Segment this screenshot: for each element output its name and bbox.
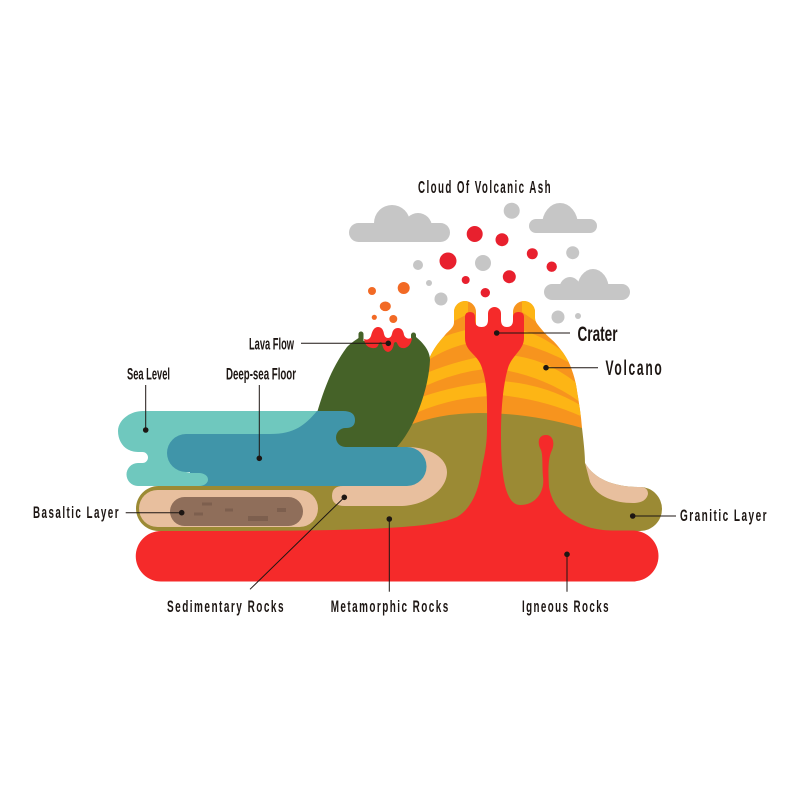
label: Lava Flow: Lava Flow [249,334,294,354]
label: Sedimentary Rocks: Sedimentary Rocks [167,597,285,616]
cloud: upper right [529,203,597,233]
small volcano lava [364,327,412,352]
basaltic layer (brown) [170,497,303,526]
label: Granitic Layer [630,506,768,525]
sea (teal) [118,411,330,486]
label: Cloud Of Volcanic Ash: Cloud Of Volcanic Ash [418,177,552,197]
magma (igneous rocks) with main vent [136,307,658,582]
ash particles: grey [413,203,581,324]
volcano cone with stripes [412,301,582,428]
label: Sedimentary Rocks [167,494,347,616]
cloud: lower right [544,269,630,300]
label: Deep-sea Floor [226,364,296,461]
cloud: left [349,205,450,242]
lava bombs: red [440,226,557,297]
label: Lava Flow [249,334,391,354]
label: Metamorphic Rocks: Metamorphic Rocks [331,597,450,616]
deep sea (blue) [167,411,426,486]
label: Volcano: Volcano [606,357,664,380]
label: Sea Level [127,364,170,433]
label: Volcano [543,357,664,380]
granitic / metamorphic layer (olive) [136,413,662,531]
label: Crater: Crater [578,323,618,346]
label: Basaltic Layer: Basaltic Layer [33,503,120,522]
small volcano (green) [315,332,430,447]
label: Deep-sea Floor: Deep-sea Floor [226,364,296,384]
label: Sea Level: Sea Level [127,364,170,384]
label: Metamorphic Rocks [331,516,450,616]
sedimentary rocks: left beige [139,490,318,527]
label: Crater [494,323,618,346]
sedimentary rocks: centre beige [332,447,447,506]
small volcano base tongue [336,428,400,447]
label: Igneous Rocks: Igneous Rocks [522,597,610,616]
sedimentary rocks: right beige [585,463,648,503]
sea lobe tip [180,473,208,486]
label: Igneous Rocks [522,552,610,616]
lava bombs: orange [368,282,410,323]
